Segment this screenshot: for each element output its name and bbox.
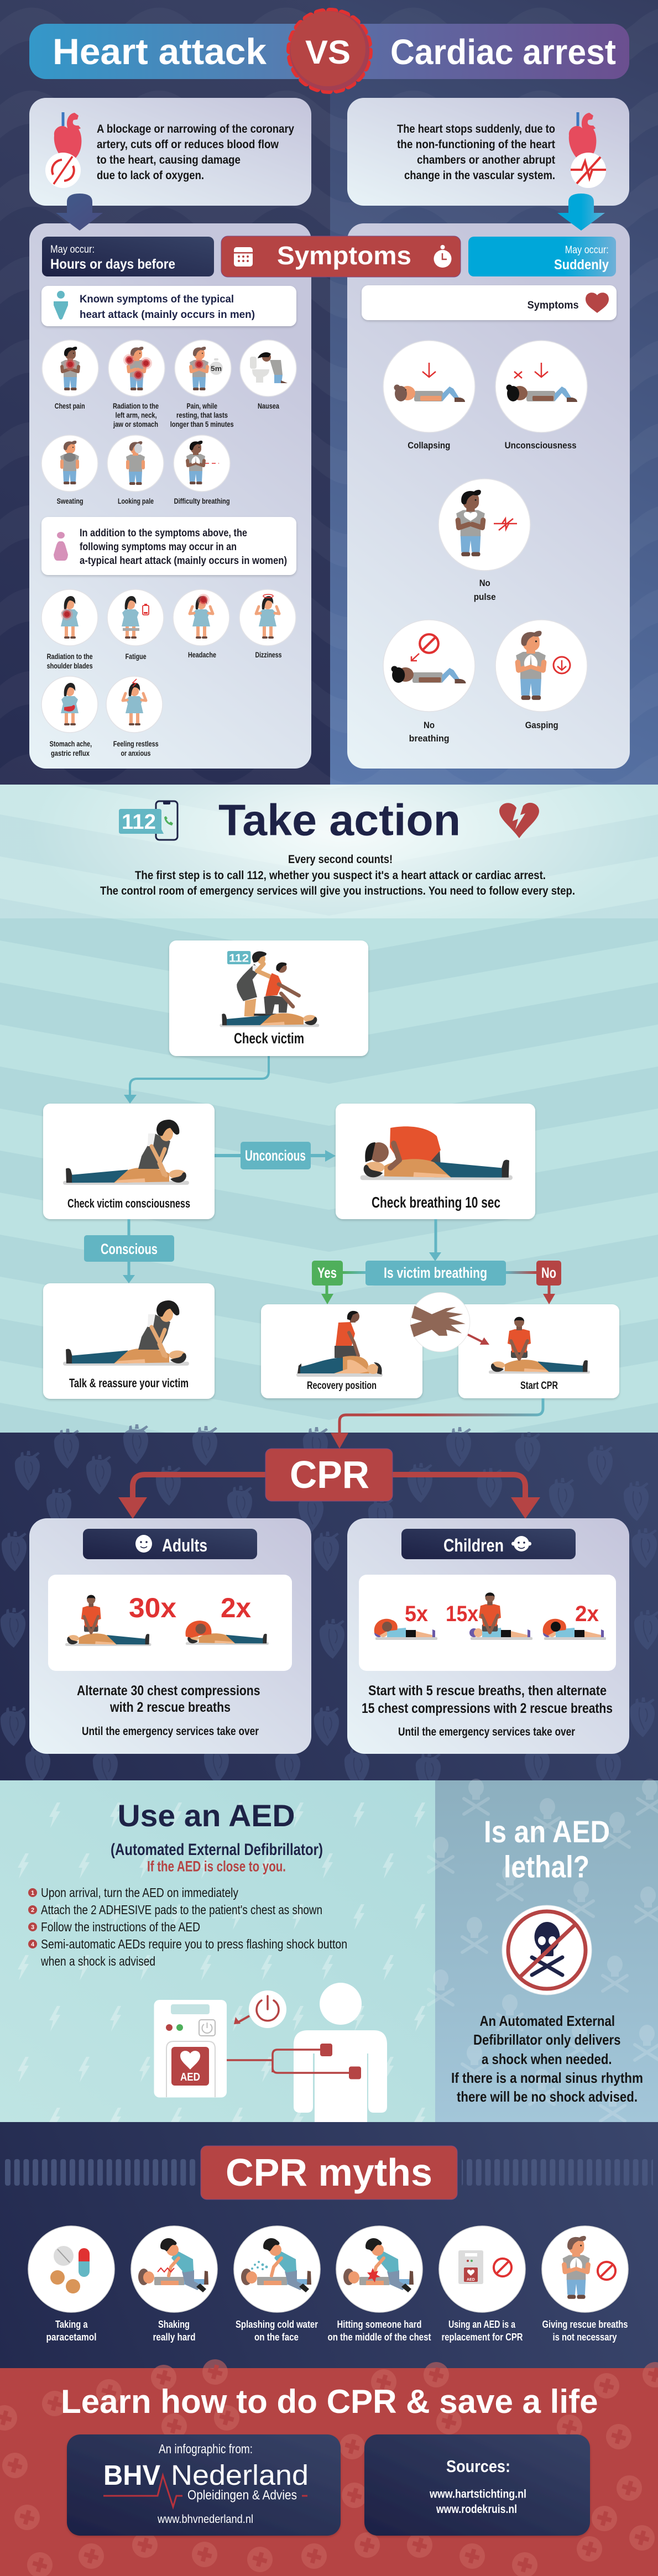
text: children instructions: Start with 5 rescue breaths, then alternate (368, 1683, 607, 1699)
myth: paracetamol (28, 2226, 114, 2343)
icon: no breathing (391, 634, 466, 683)
panel: heart attack symptoms (29, 223, 311, 769)
illustration: children 5, 15 and 2 (359, 1575, 616, 1671)
panel: CPR myths (0, 2122, 658, 2368)
illustration: talk and reassure (63, 1300, 189, 1366)
heading: CPR (265, 1449, 393, 1501)
icon: stopwatch (434, 245, 451, 268)
logo: BHV Nederland (103, 2459, 309, 2507)
panel: footer (0, 2359, 658, 2576)
myth: hitting chest (327, 2226, 431, 2343)
illustration: AED device (154, 2000, 227, 2098)
card: sources (364, 2434, 590, 2536)
card: check breathing (336, 1104, 535, 1219)
labels: typical symptoms: Nausea (258, 401, 279, 410)
badge: VS seal (290, 11, 369, 91)
myth: cold water: Splashing cold water (236, 2319, 318, 2330)
heading: known symptoms men (41, 286, 296, 326)
labels: atypical symptoms: or anxious (121, 749, 151, 757)
illustration: children 5, 15 and 2: 5x (405, 1602, 428, 1626)
panel: is an AED lethal (429, 1779, 658, 2122)
pattern: skulls (429, 1779, 658, 2121)
card: check breathing: Check breathing 10 sec (372, 1194, 500, 1211)
icon: broken heart (499, 803, 539, 838)
illustration: adults 30 compressions and 2 breaths: 2x (221, 1592, 251, 1623)
text: cardiac arrest definition (397, 123, 555, 182)
tag: yes: Yes (317, 1265, 337, 1281)
heading: symptoms banner (221, 236, 461, 277)
illustration: two rescuers with victim: 112 (229, 952, 249, 964)
heading: known symptoms men: Known symptoms of the typical (80, 294, 234, 305)
icon: pain lasting five minutes (190, 347, 223, 390)
text: cardiac arrest definition: change in the vascular system. (404, 169, 555, 182)
heading: CPR: CPR (290, 1453, 369, 1496)
heading: known symptoms men: heart attack (mainly occurs in men) (80, 309, 255, 321)
myth: AED replacement: AED (467, 2278, 475, 2282)
badge: VS seal: VS (305, 34, 351, 71)
icon: 112 phone: 112 (122, 811, 156, 834)
card: BHV Nederland credit (67, 2434, 341, 2536)
icon: collapsing (394, 363, 465, 402)
section background: teal action area (0, 730, 658, 1462)
myth: cold water (234, 2226, 320, 2343)
myth: paracetamol: Taking a (55, 2319, 88, 2330)
card: talk and reassure (43, 1283, 215, 1399)
myth: rescue breaths not necessary: Giving rescue breaths (542, 2319, 628, 2330)
header bar: cardiac arrest (337, 24, 629, 79)
card: talk and reassure: Talk & reassure your victim (69, 1376, 189, 1390)
section background: CPR dark with hearts (0, 1424, 658, 1792)
panel: cardiac arrest symptoms (347, 223, 630, 769)
text: heart attack definition: to the heart, causing damage (97, 154, 241, 166)
symptom circles: atypical heart attack (41, 589, 296, 733)
list: AED steps: 3 (31, 1924, 34, 1931)
header bar: heart attack (29, 24, 322, 79)
text: adults instructions: Alternate 30 chest compressions (77, 1683, 260, 1699)
icon: headache (190, 594, 213, 639)
icon: gasping (516, 631, 570, 700)
labels: cardiac arrest symptoms: breathing (409, 733, 450, 744)
tag: no: No (541, 1265, 556, 1281)
heading: symptoms with heart (362, 285, 617, 320)
tag: yes (312, 1261, 343, 1286)
callout: may occur hours or days before: Hours or days before (50, 257, 175, 272)
text: children instructions: 15 chest compressions with 2 rescue breaths (362, 1701, 613, 1716)
text: adults instructions (77, 1683, 260, 1738)
heading: is an AED lethal (484, 1814, 610, 1884)
myth: hitting chest: on the middle of the chest (327, 2332, 431, 2343)
arrow: cardiac arrest down (557, 194, 605, 231)
tag: unconscious: Unconcious (245, 1147, 306, 1164)
text: children instructions (362, 1683, 613, 1738)
icon: nausea (250, 352, 288, 383)
icon: looking pale (126, 441, 145, 485)
tag: no (536, 1261, 561, 1286)
labels: typical symptoms: resting, that lasts (176, 410, 228, 419)
text: heart attack definition (97, 123, 294, 182)
text: take action intro: The control room of emergency services will give you instructions. You need to follow every step. (100, 885, 575, 897)
text: take action intro: Every second counts! (288, 853, 393, 866)
card: sources: www.hartstichting.nl (429, 2488, 526, 2500)
subheading: AED definition: If the AED is close to you. (147, 1858, 286, 1874)
panel: children CPR (347, 1518, 629, 1754)
list: AED steps: Attach the 2 ADHESIVE pads to the patient's chest as shown (41, 1903, 322, 1917)
card: start CPR: Start CPR (520, 1380, 558, 1392)
labels: atypical symptoms: Radiation to the (47, 652, 93, 661)
card: check victim (169, 940, 368, 1056)
labels: cardiac arrest symptoms: Unconsciousness (505, 440, 577, 451)
labels: typical symptoms: left arm, neck, (116, 410, 157, 419)
panel: heart attack description (29, 98, 311, 206)
logo: BHV Nederland: Opleidingen & Advies (187, 2488, 297, 2502)
icon: sweating (60, 441, 79, 484)
arrow: CPR to adults (118, 1475, 265, 1519)
list: AED steps: when a shock is advised (40, 1954, 155, 1968)
myth: paracetamol: paracetamol (46, 2332, 96, 2343)
icon: no skull (502, 1905, 592, 1995)
labels: typical symptoms: Difficulty breathing (174, 497, 230, 505)
myth: shaking: really hard (153, 2332, 196, 2343)
pattern: medical crosses (0, 2359, 658, 2576)
heading: CPR myths (201, 2146, 457, 2199)
tag: unconscious (241, 1142, 311, 1169)
icon: radiation pain (123, 347, 152, 390)
arrow: check victim to consciousness (124, 1056, 269, 1104)
heading: symptoms with heart: Symptoms (528, 300, 579, 311)
heading: use an AED: Use an AED (117, 1798, 295, 1833)
heading: is an AED lethal: lethal? (504, 1849, 589, 1884)
text: adults instructions: with 2 rescue breaths (109, 1700, 231, 1715)
list: AED steps: 4 (31, 1941, 35, 1948)
labels: atypical symptoms: Stomach ache, (50, 739, 92, 748)
illustration: adults 30 compressions and 2 breaths (48, 1575, 292, 1671)
myth: rescue breaths not necessary (542, 2226, 628, 2343)
text: AED explanation: Defibrillator only delivers (473, 2031, 620, 2048)
text: AED explanation: An Automated External (480, 2013, 615, 2029)
illustration: two rescuers with victim (220, 951, 319, 1027)
labels: cardiac arrest symptoms: Gasping (525, 720, 558, 730)
icon: unconsciousness (506, 363, 577, 402)
text: adults instructions: Until the emergency services take over (82, 1725, 259, 1738)
labels: cardiac arrest symptoms: No (424, 720, 435, 730)
labels: typical symptoms: Chest pain (55, 401, 85, 410)
arrow: consciousness to conscious (123, 1219, 135, 1283)
icon: power button (234, 1990, 286, 2028)
callout: may occur hours or days before (42, 237, 214, 276)
tag: conscious: Conscious (101, 1241, 158, 1257)
list: AED steps: 1 (31, 1890, 34, 1896)
card: check victim consciousness: Check victim consciousness (67, 1196, 190, 1210)
card: recovery position: Recovery position (307, 1380, 377, 1392)
tag: adults: Adults (162, 1535, 207, 1555)
callout: may occur suddenly: May occur: (565, 244, 609, 256)
icon: pain lasting five minutes: 5m (211, 364, 222, 373)
illustration: start CPR (489, 1317, 590, 1373)
labels: cardiac arrest symptoms: No (479, 578, 490, 588)
list: AED steps: 2 (31, 1907, 34, 1914)
labels: atypical symptoms: Headache (188, 650, 216, 659)
icon: shoulder blade radiation (61, 596, 79, 639)
myth: AED replacement (439, 2226, 525, 2343)
subheading: AED definition: (Automated External Defibrillator) (111, 1841, 323, 1859)
tag: children (401, 1529, 576, 1559)
icon: dizziness (256, 594, 279, 639)
labels: typical symptoms: Pain, while (187, 401, 217, 410)
text: cardiac arrest definition: the non-functioning of the heart (397, 138, 555, 151)
illustration: rescuer checks breathing (361, 1126, 513, 1180)
labels: atypical symptoms: gastric reflux (51, 749, 90, 757)
heading: atypical symptoms women: a-typical heart attack (mainly occurs in women) (80, 555, 287, 567)
labels: typical symptoms: jaw or stomach (113, 420, 158, 429)
panel: use an AED (0, 1780, 435, 2122)
labels: cardiac arrest symptoms: pulse (474, 592, 496, 602)
text: cardiac arrest definition: chambers or another abrupt (417, 154, 555, 166)
labels: atypical symptoms: Dizziness (255, 650, 282, 659)
list: AED steps (28, 1885, 347, 1968)
heading: symptoms banner: Symptoms (277, 241, 411, 270)
labels: atypical symptoms: shoulder blades (47, 661, 93, 670)
card: check victim: Check victim (234, 1030, 304, 1047)
logo: BHV Nederland: BHV (103, 2459, 160, 2491)
myth: rescue breaths not necessary: is not necessary (553, 2332, 617, 2343)
card: recovery position (261, 1304, 422, 1398)
text: heart attack definition: due to lack of oxygen. (97, 169, 204, 182)
labels: typical symptoms: longer than 5 minutes (170, 420, 234, 429)
panel: adults CPR (29, 1518, 311, 1754)
text: heart attack definition: artery, cuts off or reduces blood flow (97, 138, 279, 151)
arrow: heart attack down (56, 194, 103, 231)
arrow: unconscious to check breathing (215, 1150, 336, 1162)
arrow: no to start CPR (543, 1286, 555, 1304)
card: check victim consciousness (43, 1104, 215, 1219)
text: take action intro: The first step is to call 112, whether you suspect it's a heart attack or cardiac arrest. (135, 869, 546, 882)
icon: stomach ache (61, 683, 79, 725)
icon: 112 phone (119, 801, 177, 840)
heading: is an AED lethal: Is an AED (484, 1814, 610, 1849)
labels: typical symptoms: Sweating (57, 497, 83, 505)
heading: CPR myths: CPR myths (226, 2151, 432, 2194)
labels: typical symptoms (55, 401, 279, 505)
heading: heart attack: Heart attack (53, 31, 267, 72)
card: sources: www.rodekruis.nl (436, 2503, 517, 2516)
icon: anatomical heart with ECG (569, 112, 606, 188)
logo: BHV Nederland: Nederland (171, 2459, 309, 2491)
illustration: AED device: AED (180, 2071, 200, 2083)
card: BHV Nederland credit: An infographic from: (159, 2442, 253, 2456)
card: BHV Nederland credit: www.bhvnederland.nl (157, 2513, 253, 2526)
heading: cardiac arrest: Cardiac arrest (390, 32, 616, 72)
icon: fatigue (122, 596, 149, 639)
arrow: start CPR to CPR (331, 1398, 543, 1449)
arrow: yes to recovery (321, 1286, 333, 1304)
heading: atypical symptoms women (41, 517, 296, 575)
connectors: decision yes and no (343, 1271, 536, 1274)
illustration: person with AED pads (227, 1983, 387, 2122)
myth: shaking (131, 2226, 217, 2343)
illustration: children 5, 15 and 2: 15x (446, 1602, 478, 1626)
illustration: recovery position (296, 1311, 383, 1377)
card: start CPR (458, 1304, 619, 1398)
subheading: AED definition (111, 1841, 323, 1874)
text: AED explanation (451, 2013, 643, 2105)
heading: atypical symptoms women: In addition to the symptoms above, the (80, 527, 247, 539)
myth: AED replacement: replacement for CPR (441, 2332, 523, 2343)
myth: cold water: on the face (254, 2332, 299, 2343)
symptom circles: cardiac arrest (383, 341, 587, 712)
myth: shaking: Shaking (158, 2319, 190, 2330)
labels: atypical symptoms: Fatigue (126, 652, 147, 661)
labels: cardiac arrest symptoms (408, 440, 577, 744)
card: sources: Sources: (446, 2457, 510, 2476)
myth: hitting chest: Hitting someone hard (337, 2319, 421, 2330)
tag: conscious (84, 1235, 174, 1262)
icon: feeling restless (123, 679, 146, 725)
labels: atypical symptoms (47, 650, 282, 757)
list: AED steps: Semi-automatic AEDs require you to press flashing shock button (41, 1937, 347, 1951)
text: children instructions: Until the emergency services take over (398, 1726, 575, 1738)
text: take action intro (100, 853, 575, 897)
icon: anatomical heart with blocked flow (45, 112, 81, 188)
icon: hand position close-up (410, 1292, 489, 1352)
text: heart attack definition: A blockage or narrowing of the coronary (97, 123, 294, 135)
list: AED steps: Follow the instructions of the AED (41, 1920, 200, 1934)
arrow: CPR to children (393, 1475, 540, 1519)
tag: children: Children (443, 1535, 504, 1555)
icon: adult face (135, 1535, 152, 1553)
callout: may occur hours or days before: May occur: (50, 244, 95, 255)
tag: is victim breathing (365, 1261, 506, 1286)
labels: atypical symptoms: Feeling restless (113, 739, 159, 748)
icon: child face (511, 1536, 531, 1551)
arrow: check breathing to decision (429, 1219, 441, 1261)
heading: take action (119, 795, 539, 845)
myth: AED replacement: Using an AED is a (448, 2319, 516, 2330)
labels: typical symptoms: Looking pale (118, 497, 154, 505)
illustration: rescuer checks consciousness (63, 1120, 189, 1185)
labels: cardiac arrest symptoms: Collapsing (408, 440, 450, 451)
illustration: adults 30 compressions and 2 breaths: 30x (129, 1592, 176, 1623)
illustration: children 5, 15 and 2: 2x (575, 1602, 599, 1626)
text: cardiac arrest definition: The heart stops suddenly, due to (397, 123, 555, 135)
section background: heart attack vs cardiac arrest (0, 0, 658, 785)
callout: may occur suddenly: Suddenly (554, 257, 609, 273)
symptom circles: typical heart attack (41, 340, 296, 492)
heading: take action: Take action (218, 795, 461, 845)
icon: chest pain (61, 347, 80, 390)
icon: no pulse (456, 490, 517, 556)
icon: difficulty breathing (186, 441, 219, 484)
list: AED steps: Upon arrival, turn the AED on immediately (41, 1885, 238, 1900)
tag: is victim breathing: Is victim breathing (384, 1265, 487, 1281)
callout: may occur suddenly (468, 237, 616, 276)
panel: cardiac arrest description (347, 98, 629, 206)
icon: calendar (234, 247, 253, 267)
text: AED explanation: a shock when needed. (482, 2051, 612, 2067)
tag: adults (83, 1529, 257, 1559)
heading: atypical symptoms women: following symptoms may occur in an (80, 541, 237, 553)
labels: typical symptoms: Radiation to the (113, 401, 159, 410)
heading: learn CPR: Learn how to do CPR & save a life (61, 2383, 598, 2420)
